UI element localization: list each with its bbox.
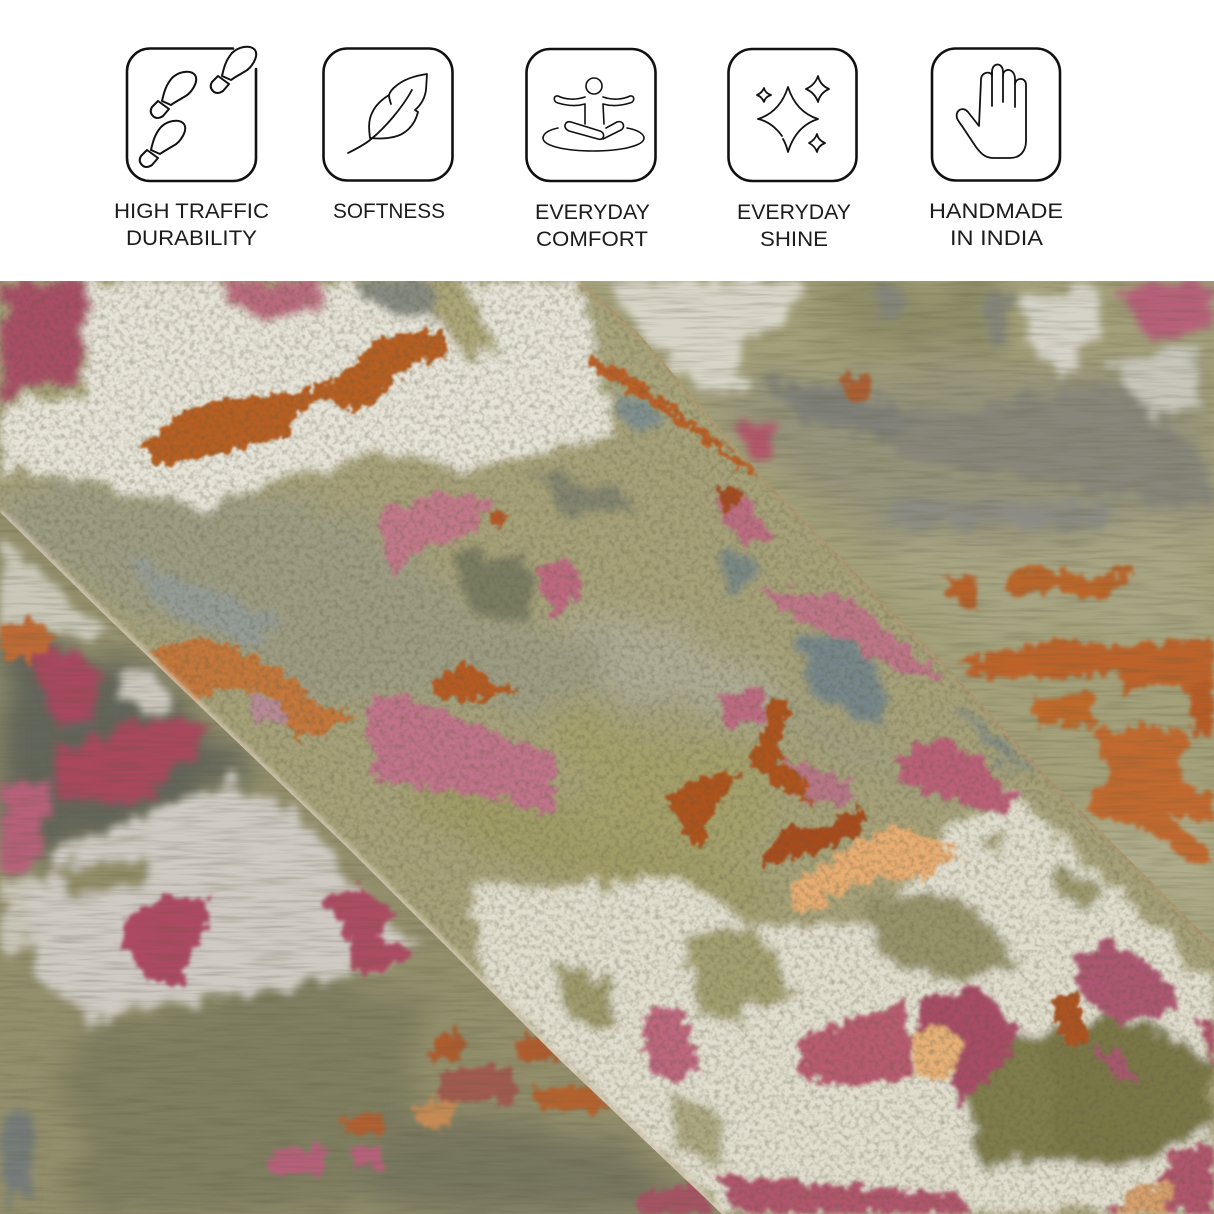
background rug: upper right	[560, 281, 1214, 961]
label: everyday comfort: COMFORT	[536, 228, 648, 251]
label: high traffic durability: DURABILITY	[126, 227, 257, 250]
feature: softness	[324, 48, 452, 223]
icon: sparkles	[728, 49, 856, 181]
label: everyday shine	[737, 201, 851, 251]
white top area	[0, 281, 610, 510]
background rug: lower left	[0, 512, 722, 1214]
icon: feather	[324, 48, 452, 180]
feature: high traffic durability	[114, 47, 269, 250]
label: everyday comfort: EVERYDAY	[535, 201, 650, 224]
pink patches	[380, 490, 490, 575]
label: everyday comfort	[535, 201, 650, 251]
label: high traffic durability: HIGH TRAFFIC	[114, 200, 269, 223]
icon: footprints	[127, 47, 256, 181]
label: everyday shine: SHINE	[760, 228, 828, 251]
feature: everyday shine	[728, 49, 856, 251]
rolled rug	[0, 281, 1214, 1214]
panel: product photo of rolled rug	[0, 281, 1214, 1214]
icon: meditating figure	[526, 49, 656, 181]
label: handmade in india	[929, 200, 1063, 250]
feature: everyday comfort	[526, 49, 656, 251]
rust orange patches	[140, 328, 448, 465]
label: everyday shine: EVERYDAY	[737, 201, 851, 224]
icon: hand	[932, 48, 1060, 180]
white lower area	[470, 790, 1214, 1214]
label: handmade in india: HANDMADE	[929, 200, 1063, 223]
label: softness: SOFTNESS	[333, 200, 445, 223]
label: high traffic durability	[114, 200, 269, 250]
feature: handmade in india	[929, 48, 1063, 250]
panel: icon row	[114, 47, 1063, 251]
roll edges	[0, 512, 722, 1214]
label: handmade in india: IN INDIA	[950, 227, 1043, 250]
